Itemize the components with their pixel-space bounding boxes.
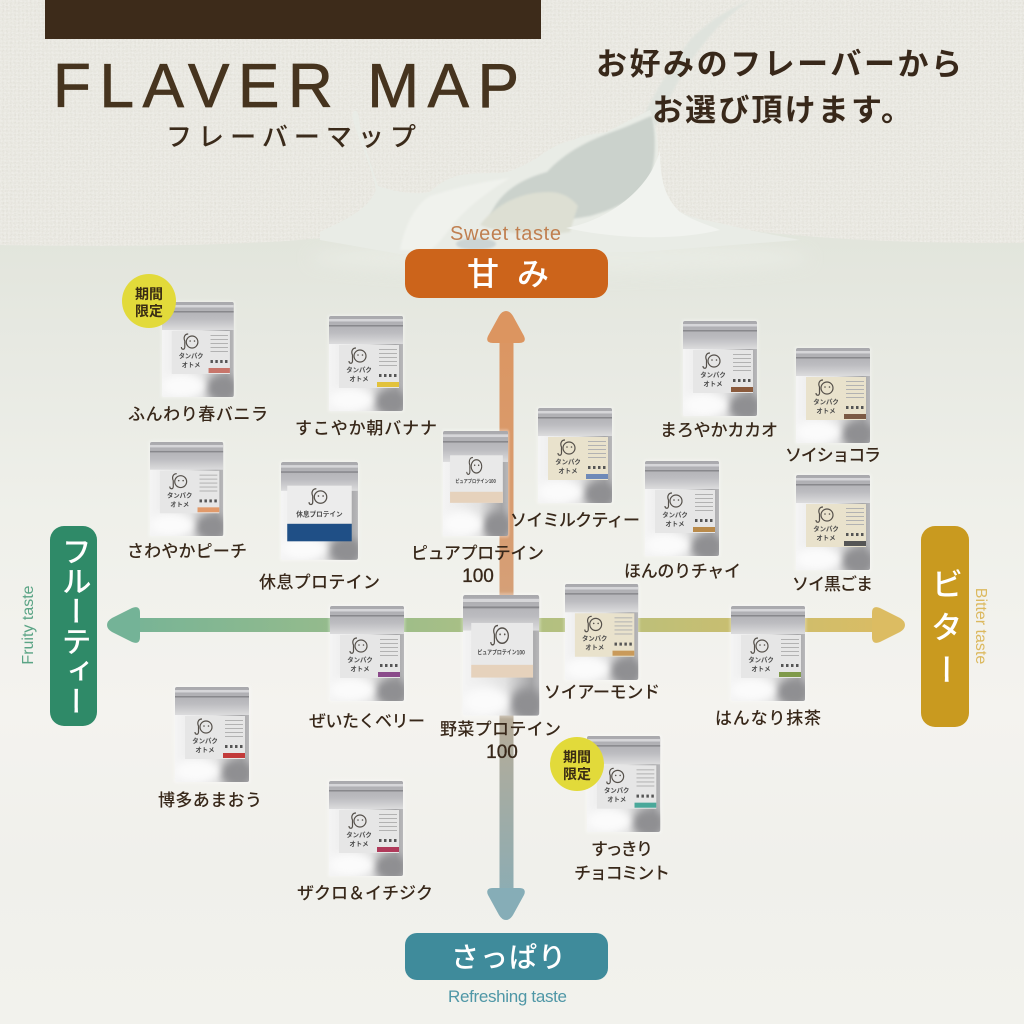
product: ソイアーモンド: ソイアーモンド	[544, 683, 660, 702]
axis label: fruity: フルーティー	[56, 536, 90, 716]
product: ソイショコラ: オトメ	[816, 407, 836, 415]
product: すっきりチョコミント	[574, 734, 670, 883]
product: ソイショコラ: ソイショコラ	[785, 446, 881, 465]
product: はんなり抹茶: タンパク	[748, 655, 774, 664]
product: ぜいたくベリー: ぜいたくベリー	[309, 712, 425, 731]
product: ぜいたくベリー	[309, 604, 425, 731]
product: ソイミルクティー: オトメ	[558, 467, 578, 475]
product: 休息プロテイン: 休息プロテイン	[296, 510, 343, 519]
product: はんなり抹茶	[715, 604, 821, 728]
product: すっきりチョコミント: チョコミント	[574, 864, 670, 883]
product: まろやかカカオ: オトメ	[703, 380, 723, 388]
product: 博多あまおう: 博多あまおう	[158, 791, 262, 810]
badge: 期間限定: 限定	[135, 303, 163, 319]
subtitle: フレーバーマップ	[166, 122, 416, 152]
top brown bar	[45, 0, 541, 39]
product: ピュアプロテイン100: ピュアプロテイン	[411, 544, 544, 563]
milk splash	[310, 0, 810, 274]
product: すっきりチョコミント: すっきり	[591, 840, 653, 859]
axis label: refreshing: さっぱり	[451, 942, 566, 973]
product: すこやか朝バナナ: すこやか朝バナナ	[295, 419, 437, 438]
product: すこやか朝バナナ: タンパク	[346, 365, 372, 374]
intro text: お選び頂けます。	[652, 93, 912, 128]
product: ソイ黒ごま: オトメ	[816, 534, 836, 542]
product: ピュアプロテイン100	[411, 429, 544, 587]
product: 休息プロテイン: 休息プロテイン	[259, 573, 380, 592]
product: ザクロ＆イチジク	[297, 780, 433, 903]
product: ピュアプロテイン100: 100	[462, 566, 494, 587]
product: ザクロ＆イチジク: タンパク	[346, 830, 372, 839]
product: ソイアーモンド	[544, 582, 660, 702]
product: さわやかピーチ	[127, 441, 247, 561]
badge: 期間限定	[122, 274, 176, 328]
axis label: bitter: ビター	[927, 568, 963, 696]
product: 野菜プロテイン100: 野菜プロテイン	[440, 720, 561, 739]
axis label: fruity	[20, 526, 97, 726]
product: すこやか朝バナナ: オトメ	[349, 375, 369, 383]
axis label: refreshing: Refreshing taste	[448, 987, 567, 1006]
badge: 期間限定: 期間	[135, 286, 163, 302]
product: ふんわり春バニラ: タンパク	[179, 351, 204, 360]
product: 野菜プロテイン100	[440, 593, 561, 763]
product: さわやかピーチ: タンパク	[167, 490, 192, 499]
axis label: sweet	[405, 223, 608, 298]
product: ソイショコラ	[785, 346, 881, 465]
product: 博多あまおう	[158, 686, 262, 810]
product: まろやかカカオ	[660, 320, 778, 440]
vertical arrow	[487, 311, 525, 920]
product: ザクロ＆イチジク: オトメ	[349, 840, 369, 848]
product: ほんのりチャイ: オトメ	[665, 520, 685, 528]
badge: 期間限定 (mint)	[550, 737, 604, 791]
product: まろやかカカオ: まろやかカカオ	[660, 421, 778, 440]
axis label: sweet: Sweet taste	[450, 223, 561, 245]
product: はんなり抹茶: はんなり抹茶	[715, 709, 821, 728]
product: ソイ黒ごま: タンパク	[813, 524, 839, 533]
product: まろやかカカオ: タンパク	[700, 370, 726, 379]
product: ソイミルクティー: ソイミルクティー	[510, 511, 640, 530]
product: ザクロ＆イチジク: ザクロ＆イチジク	[297, 884, 433, 903]
product: 博多あまおう: オトメ	[195, 746, 215, 754]
product: 休息プロテイン	[259, 460, 380, 592]
product: 野菜プロテイン100: ピュアプロテイン100	[477, 649, 525, 657]
product: 博多あまおう: タンパク	[192, 736, 218, 745]
product: ほんのりチャイ: ほんのりチャイ	[624, 562, 741, 581]
horizontal arrow	[107, 607, 905, 643]
product: はんなり抹茶: オトメ	[751, 665, 771, 673]
axis label: refreshing	[405, 933, 608, 1006]
product: ソイ黒ごま: ソイ黒ごま	[792, 575, 873, 594]
badge: 期間限定 (mint): 限定	[563, 766, 591, 782]
intro text: お好みのフレーバーから	[596, 47, 962, 82]
product: ソイアーモンド: タンパク	[582, 633, 607, 643]
product: すこやか朝バナナ	[295, 314, 437, 438]
product: ぜいたくベリー: オトメ	[350, 665, 370, 673]
product: ソイショコラ: タンパク	[813, 397, 839, 406]
axis label: bitter	[921, 526, 989, 727]
product: ほんのりチャイ	[624, 460, 741, 581]
intro text	[596, 47, 962, 128]
product: ソイミルクティー: タンパク	[555, 457, 581, 466]
axis label: sweet: 甘	[467, 256, 499, 292]
product: ピュアプロテイン100: ピュアプロテイン100	[455, 477, 496, 485]
product: ふんわり春バニラ: オトメ	[182, 361, 200, 369]
axis label: sweet: み	[517, 256, 549, 292]
product: ふんわり春バニラ: ふんわり春バニラ	[128, 405, 268, 424]
product: ソイ黒ごま	[792, 474, 874, 594]
badge: 期間限定 (mint): 期間	[563, 749, 591, 765]
product: 野菜プロテイン100: 100	[486, 742, 518, 763]
product: さわやかピーチ: さわやかピーチ	[127, 542, 247, 561]
product: ぜいたくベリー: タンパク	[347, 655, 373, 664]
product: さわやかピーチ: オトメ	[170, 500, 189, 508]
product: ほんのりチャイ: タンパク	[662, 510, 688, 519]
product: すっきりチョコミント: オトメ	[607, 796, 626, 804]
product: ふんわり春バニラ	[128, 300, 268, 424]
axis label: bitter: Bitter taste	[972, 588, 989, 664]
product: ソイミルクティー	[510, 406, 640, 530]
title: FLAVER MAP	[53, 52, 519, 121]
axis label: fruity: Fruity taste	[20, 585, 37, 665]
product: すっきりチョコミント: タンパク	[604, 785, 629, 795]
product: ソイアーモンド: オトメ	[585, 644, 604, 652]
